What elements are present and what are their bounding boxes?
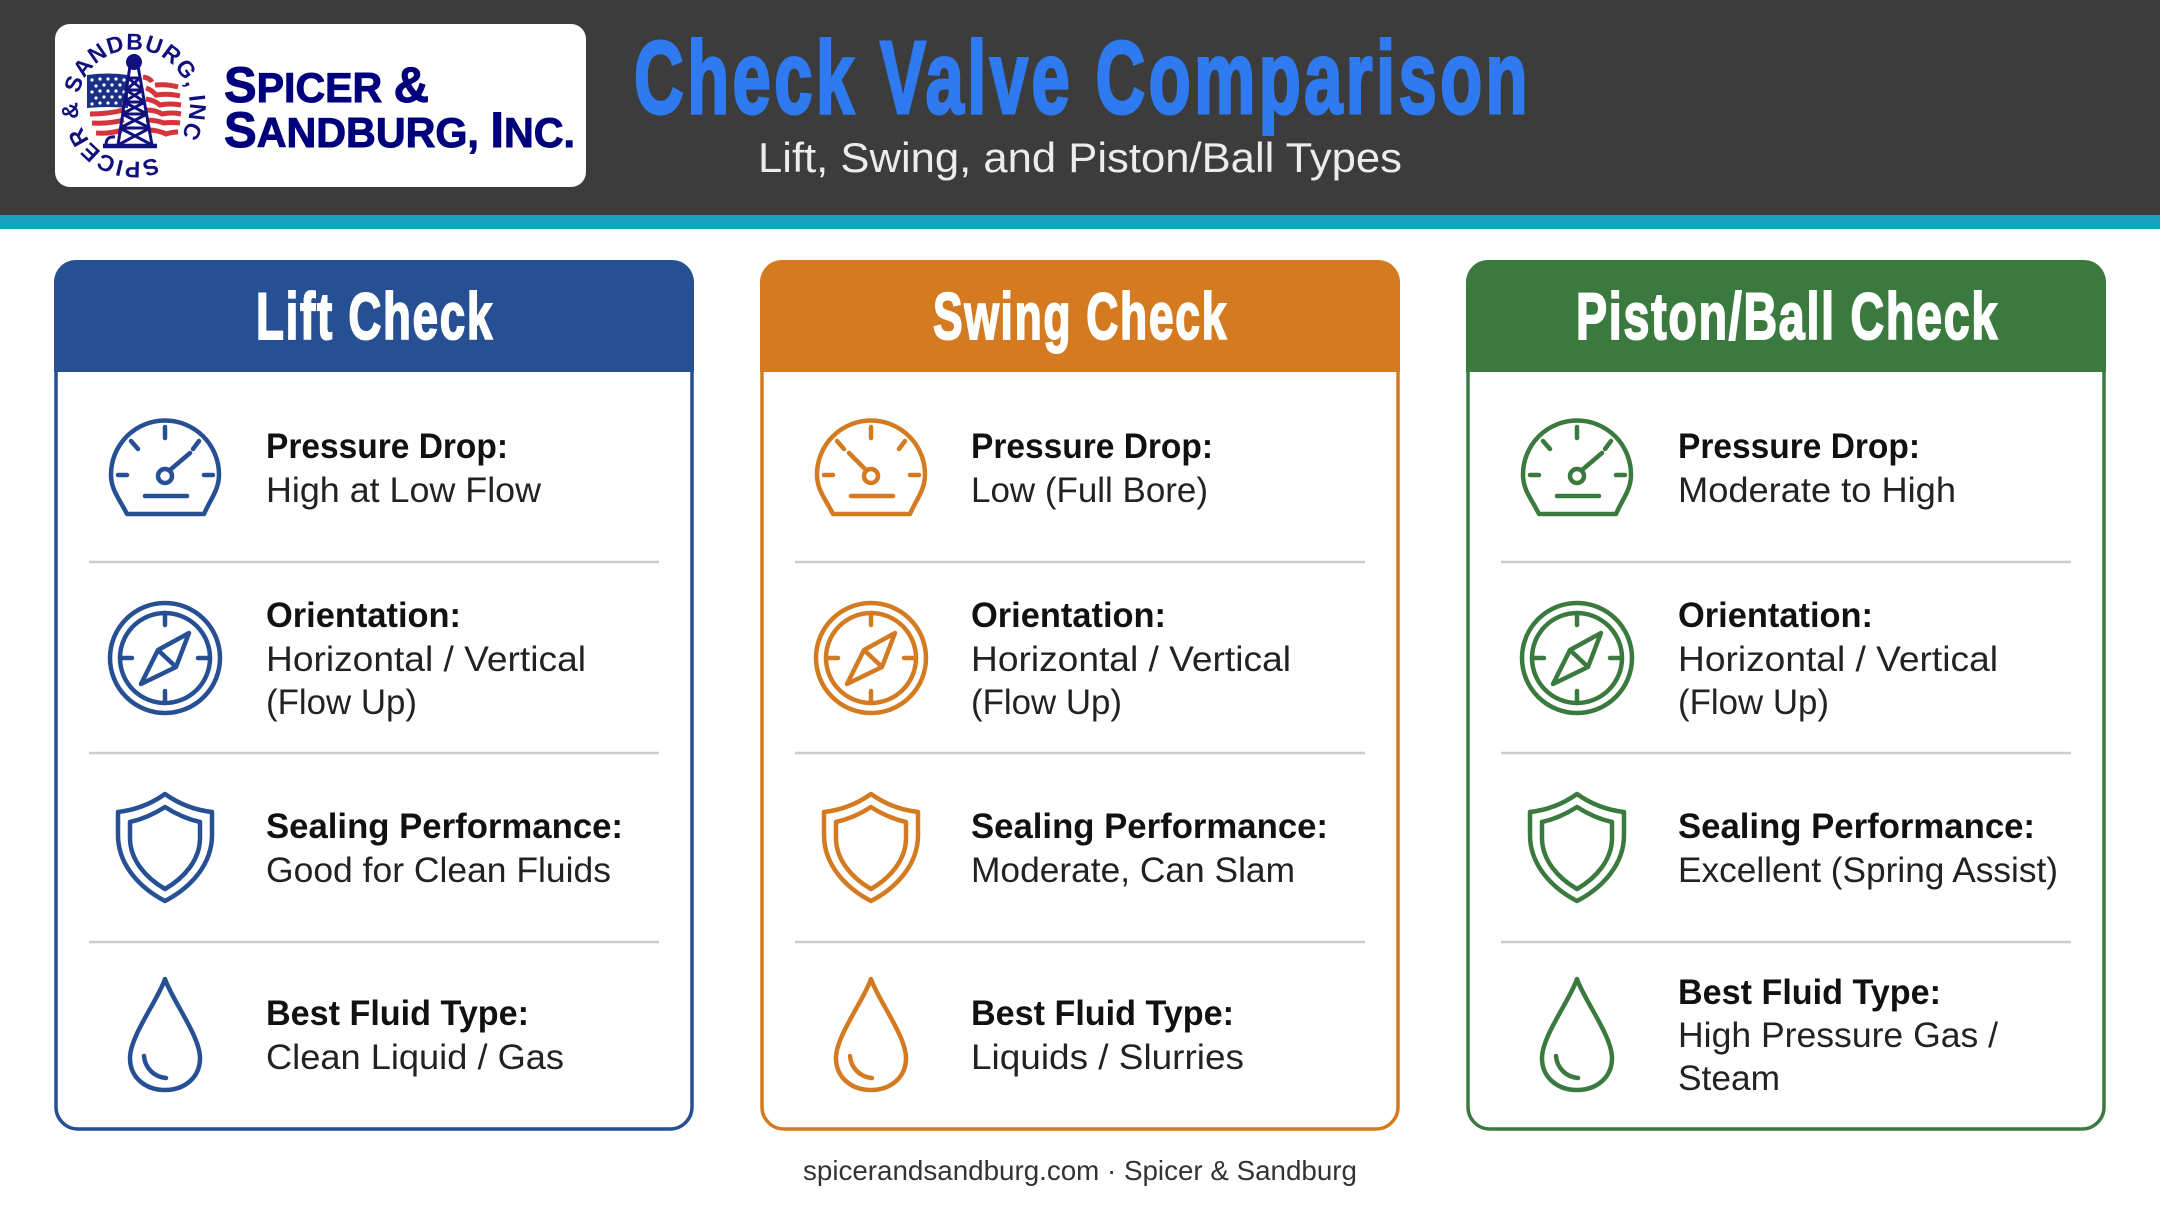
- icon: fluid drop: [130, 979, 200, 1090]
- text: sealing performance: [266, 807, 623, 890]
- text: orientation: Horizontal / Vertical: [971, 640, 1291, 679]
- text: orientation: [971, 596, 1291, 722]
- card frame: [1468, 262, 2104, 1129]
- icon: compass: [816, 603, 926, 713]
- text: pressure drop: Pressure Drop:: [266, 427, 508, 466]
- text: best fluid type: Best Fluid Type:: [1678, 973, 1941, 1012]
- card header bar: [760, 260, 1400, 372]
- card header bar: [1466, 260, 2106, 372]
- icon: shield: [824, 794, 918, 901]
- subtitle: Lift, Swing, and Piston/Ball Types: [758, 134, 1402, 181]
- logo wordmark: SPICER &: [224, 57, 429, 113]
- icon: compass: [1522, 603, 1632, 713]
- text: best fluid type: Steam: [1678, 1059, 1780, 1098]
- logo wordmark: [224, 57, 575, 158]
- text: best fluid type: Best Fluid Type:: [971, 994, 1234, 1033]
- text: best fluid type: Clean Liquid / Gas: [266, 1038, 564, 1077]
- card heading: Piston/Ball Check: [1576, 279, 1999, 353]
- text: sealing performance: Sealing Performance:: [971, 807, 1328, 846]
- text: orientation: [1678, 596, 1998, 722]
- icon: pressure gauge: [111, 420, 219, 514]
- icon: shield: [118, 794, 212, 901]
- text: best fluid type: [971, 994, 1244, 1077]
- icon: fluid drop: [1542, 979, 1612, 1090]
- oil derrick: [103, 54, 157, 146]
- text: sealing performance: Sealing Performance:: [266, 807, 623, 846]
- text: pressure drop: Pressure Drop:: [971, 427, 1213, 466]
- text: orientation: Orientation:: [266, 596, 461, 635]
- footer credit: spicerandsandburg.com · Spicer & Sandburg: [803, 1155, 1357, 1186]
- text: best fluid type: Best Fluid Type:: [266, 994, 529, 1033]
- text: best fluid type: High Pressure Gas /: [1678, 1016, 1998, 1055]
- text: pressure drop: [971, 427, 1213, 510]
- panel: Lift Check: [54, 260, 694, 1129]
- text: orientation: (Flow Up): [1678, 683, 1829, 722]
- title: Check Valve Comparison: [634, 20, 1531, 135]
- text: sealing performance: Moderate, Can Slam: [971, 851, 1295, 890]
- card header bar: [54, 260, 694, 372]
- card heading: Lift Check: [256, 279, 494, 353]
- text: pressure drop: Pressure Drop:: [1678, 427, 1920, 466]
- text: sealing performance: Excellent (Spring Assist): [1678, 851, 2058, 890]
- logo emblem: SPICER & SANDBURG, INC: [62, 34, 206, 178]
- card frame: [56, 262, 692, 1129]
- logo wordmark: SANDBURG, INC.: [224, 102, 575, 158]
- header band: [0, 0, 2160, 229]
- panel: Piston/Ball Check: [1466, 260, 2106, 1129]
- panel: Swing Check: [760, 260, 1400, 1129]
- icon: pressure gauge: [1523, 420, 1631, 514]
- text: best fluid type: [266, 994, 564, 1077]
- text: best fluid type: Liquids / Slurries: [971, 1038, 1244, 1077]
- text: sealing performance: Good for Clean Fluids: [266, 851, 611, 890]
- card frame: [762, 262, 1398, 1129]
- text: pressure drop: [1678, 427, 1956, 510]
- text: pressure drop: Low (Full Bore): [971, 471, 1208, 510]
- text: pressure drop: High at Low Flow: [266, 471, 542, 510]
- card heading: Swing Check: [933, 279, 1228, 353]
- text: orientation: (Flow Up): [971, 683, 1122, 722]
- text: sealing performance: [1678, 807, 2058, 890]
- text: orientation: Orientation:: [971, 596, 1166, 635]
- text: orientation: Horizontal / Vertical: [1678, 640, 1998, 679]
- text: best fluid type: [1678, 973, 1998, 1098]
- icon: compass: [110, 603, 220, 713]
- icon: shield: [1530, 794, 1624, 901]
- text: orientation: [266, 596, 586, 722]
- logo: Spicer & Sandburg: [55, 24, 586, 187]
- icon: pressure gauge: [817, 420, 925, 514]
- text: orientation: Horizontal / Vertical: [266, 640, 586, 679]
- text: orientation: Orientation:: [1678, 596, 1873, 635]
- text: pressure drop: Moderate to High: [1678, 471, 1956, 510]
- text: sealing performance: Sealing Performance:: [1678, 807, 2035, 846]
- icon: fluid drop: [836, 979, 906, 1090]
- text: sealing performance: [971, 807, 1328, 890]
- text: orientation: (Flow Up): [266, 683, 417, 722]
- text: pressure drop: [266, 427, 542, 510]
